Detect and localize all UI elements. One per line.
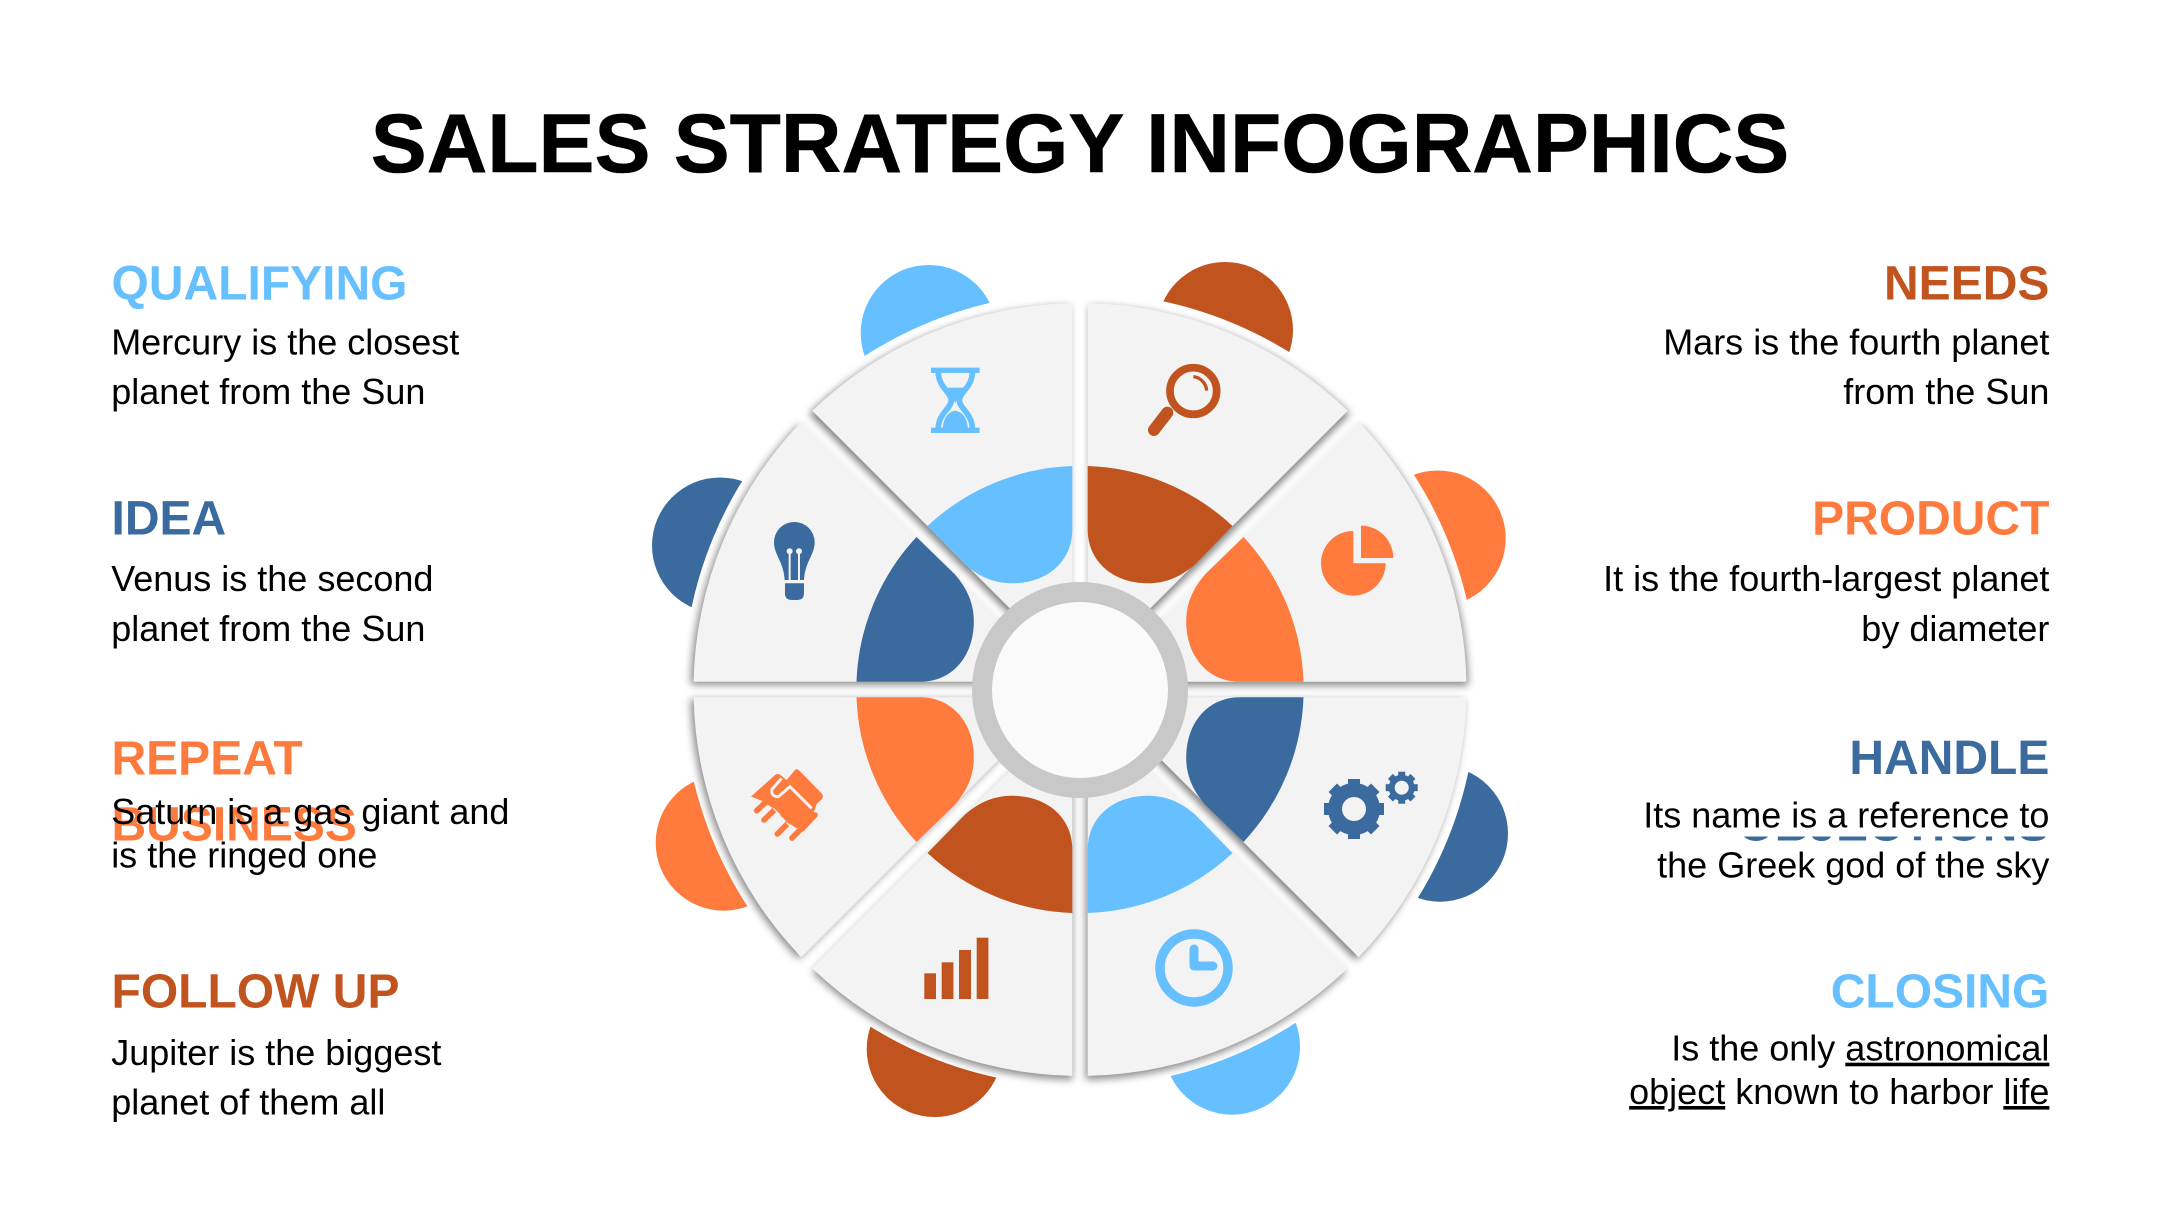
sector: pie chart [1099,422,1466,682]
text block: follow up [111,966,441,1122]
text block: closing: object known to harbor life [1629,1071,2049,1112]
icon: hourglass [931,368,980,433]
sector: magnifier [1088,303,1348,671]
text block: needs: NEEDS [1884,257,2049,310]
icon: handshake [751,769,823,838]
text block: repeat business: is the ringed one [111,835,377,876]
icon: bar chart [924,938,988,999]
sector: gears [1099,697,1466,957]
sector: clock [1088,708,1348,1076]
icon: magnifier [1154,368,1217,430]
text block: handle objections: OBJECTIONS [1737,799,2049,852]
text block: handle objections: HANDLE [1849,732,2049,785]
text block: needs: from the Sun [1843,371,2049,412]
text block: idea: Venus is the second [111,558,433,599]
outer petals [652,262,1508,1117]
text block: closing [1629,966,2049,1112]
text block: qualifying: QUALIFYING [112,257,408,310]
text block: follow up: planet of them all [111,1081,385,1122]
icon: clock [1160,934,1228,1002]
text block: idea: planet from the Sun [111,608,425,649]
text block: product: by diameter [1861,608,2049,649]
text block: repeat business [111,732,509,876]
text block: handle objections: the Greek god of the sky [1657,845,2049,886]
text block: repeat business: REPEAT [112,732,303,785]
text block: repeat business: Saturn is a gas giant and [111,791,509,832]
text block: product: PRODUCT [1812,492,2049,546]
text block: follow up: FOLLOW UP [112,966,399,1019]
text block: qualifying [111,257,459,412]
icon: light bulb [774,522,815,600]
text block: handle objections [1640,732,2060,886]
text block: repeat business: BUSINESS [112,799,357,852]
text block: needs: Mars is the fourth planet [1663,322,2049,362]
title: SALES STRATEGY INFOGRAPHICS [371,96,1789,190]
center ring [982,592,1178,788]
text block: handle objections: Its name is a reference to [1643,795,2049,836]
icon: gears [1324,772,1418,839]
text block: product: It is the fourth-largest planet [1603,558,2049,599]
text block: closing: CLOSING [1831,966,2049,1019]
text block: closing: Is the only astronomical [1671,1028,2049,1069]
text block: needs [1663,257,2049,412]
text block: follow up: Jupiter is the biggest [111,1032,441,1073]
sector: handshake [694,697,1061,957]
text block: qualifying: planet from the Sun [111,371,425,412]
text block: qualifying: Mercury is the closest [111,322,459,362]
text block: product [1603,492,2049,649]
text block: idea [111,492,433,649]
sector: hourglass [812,303,1072,671]
sector: bulb [694,422,1061,682]
icon: pie chart [1321,526,1393,596]
sector: bar chart [812,708,1072,1076]
text block: idea: IDEA [112,492,226,546]
